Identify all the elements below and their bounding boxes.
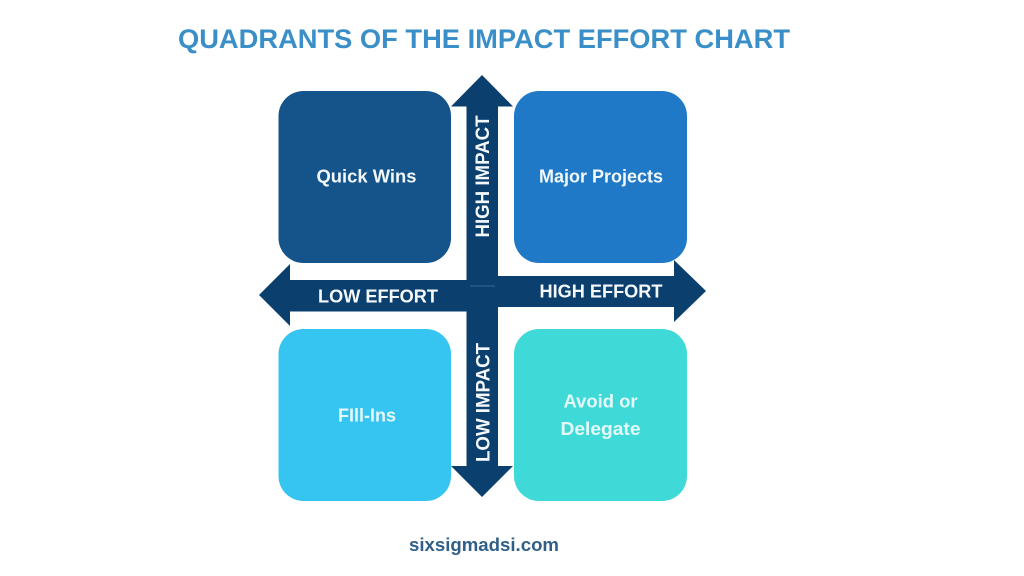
arrow: low impact: [451, 286, 513, 497]
panel: Fill-Ins: FIll-Ins: [338, 404, 396, 426]
title: QUADRANTS OF THE IMPACT EFFORT CHART: [178, 24, 791, 54]
arrow: high impact: [451, 75, 513, 286]
panel: Avoid or Delegate: [514, 329, 687, 501]
arrow: low impact: LOW IMPACT: [474, 343, 494, 462]
panel: Avoid or Delegate: Delegate: [560, 418, 640, 439]
arrow: low effort: LOW EFFORT: [318, 286, 439, 306]
panel: Major Projects: Major Projects: [539, 166, 663, 186]
arrow: low effort: [259, 264, 480, 326]
arrow: high impact: HIGH IMPACT: [473, 115, 494, 238]
arrow: high effort: HIGH EFFORT: [540, 280, 663, 302]
panel: Quick Wins: Quick Wins: [316, 166, 416, 186]
panel: Quick Wins: [278, 91, 451, 263]
panel: Fill-Ins: [278, 329, 451, 501]
arrow: high effort: [480, 260, 706, 322]
panel: Major Projects: [514, 91, 687, 263]
footer website: sixsigmadsi.com: [409, 535, 559, 555]
panel: Avoid or Delegate: Avoid or: [564, 390, 638, 412]
